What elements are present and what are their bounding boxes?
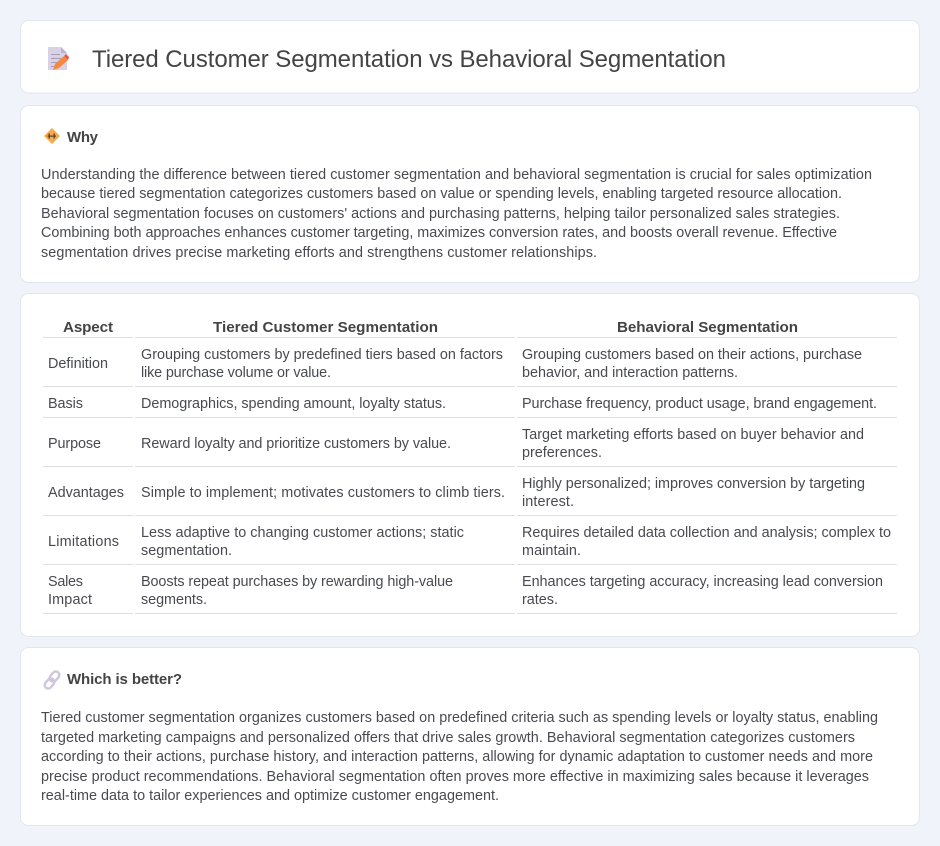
row: basis [43, 396, 897, 418]
row: definition: Definition [48, 356, 108, 372]
table header [43, 319, 897, 338]
text block: which is better [41, 710, 878, 804]
text block: why: because tiered segmentation categorizes customers based on value or spending levels, enabling targeted resource allocation. [41, 186, 842, 202]
heading: why: Why [67, 129, 99, 146]
row: limitations: segmentation. [141, 543, 232, 559]
row: sales impact: Boosts repeat purchases by rewarding high-value [141, 574, 453, 590]
text block: which is better: according to their actions, purchase history, and interaction patterns, allowing for dynamic adaptation to customer needs and more [41, 749, 873, 765]
row: sales impact: segments. [141, 592, 207, 608]
row: advantages: Simple to implement; motivates customers to climb tiers. [141, 485, 505, 501]
row: limitations: Requires detailed data collection and analysis; complex to [522, 525, 891, 541]
row: basis: Demographics, spending amount, loyalty status. [141, 396, 446, 412]
row: limitations: Less adaptive to changing customer actions; static [141, 525, 464, 541]
row: sales impact: Enhances targeting accuracy, increasing lead conversion [522, 574, 883, 590]
row: purpose: Reward loyalty and prioritize customers by value. [141, 436, 451, 452]
panel: comparison table [20, 294, 920, 636]
icon: diamond sign [44, 128, 60, 144]
row: sales impact: rates. [522, 592, 558, 608]
text block: why [41, 167, 872, 261]
row: advantages: Advantages [48, 485, 124, 501]
row: purpose: Purpose [48, 436, 101, 452]
icon: document with pencil [48, 47, 69, 70]
row: sales impact [43, 574, 897, 614]
heading: which is better: Which is better? [67, 671, 182, 688]
row: definition: Grouping customers based on their actions, purchase [522, 347, 862, 363]
row: advantages [43, 476, 897, 516]
table header: Behavioral Segmentation [617, 319, 798, 336]
row: definition: Grouping customers by predefined tiers based on factors [141, 347, 503, 363]
row: limitations: maintain. [522, 543, 581, 559]
text block: which is better: targeted marketing campaigns and personalized offers that drive sales growth. Behavioral segmentation categorizes customers [41, 730, 855, 746]
panel: why [20, 106, 920, 282]
row: definition: behavior, and interaction patterns. [522, 365, 738, 381]
panel: title header [20, 20, 920, 93]
row: basis: Basis [48, 396, 83, 412]
table header: Tiered Customer Segmentation [213, 319, 438, 336]
row: basis: Purchase frequency, product usage, brand engagement. [522, 396, 877, 412]
text block: why: segmentation drives precise marketing efforts and strengthens customer relationships. [41, 245, 597, 261]
row: definition [43, 347, 897, 387]
text block: why: Understanding the difference between tiered customer segmentation and behavioral segmentation is crucial for sales optimization [41, 167, 872, 183]
text block: which is better: Tiered customer segmentation organizes customers based on predefined criteria such as spending levels or loyalty status, enabling [41, 710, 878, 726]
row: purpose [43, 427, 897, 467]
panel: which is better [20, 648, 920, 826]
row: limitations: Limitations [48, 534, 119, 550]
row: purpose: Target marketing efforts based on buyer behavior and [522, 427, 864, 443]
row: sales impact: Impact [48, 592, 92, 608]
text block: which is better: real-time data to tailor experiences and optimize customer engagement. [41, 788, 499, 804]
icon: link [43, 670, 61, 690]
row: advantages: Highly personalized; improves conversion by targeting [522, 476, 865, 492]
table header: Aspect [63, 319, 113, 336]
title: Tiered Customer Segmentation vs Behavioral Segmentation [92, 46, 726, 73]
text block: why: Behavioral segmentation focuses on customers' actions and purchasing patterns, helping tailor personalized sales strategies. [41, 206, 840, 222]
row: sales impact: Sales [48, 574, 83, 590]
row: limitations [43, 525, 897, 565]
row: definition: like purchase volume or value. [141, 365, 331, 381]
text block: why: Combining both approaches enhances customer targeting, maximizes conversion rates, and boosts overall revenue. Effective [41, 225, 837, 241]
row: purpose: preferences. [522, 445, 602, 461]
row: advantages: interest. [522, 494, 574, 510]
text block: which is better: precise product recommendations. Behavioral segmentation often proves more effective in maximizing sales because it leverages [41, 769, 869, 785]
